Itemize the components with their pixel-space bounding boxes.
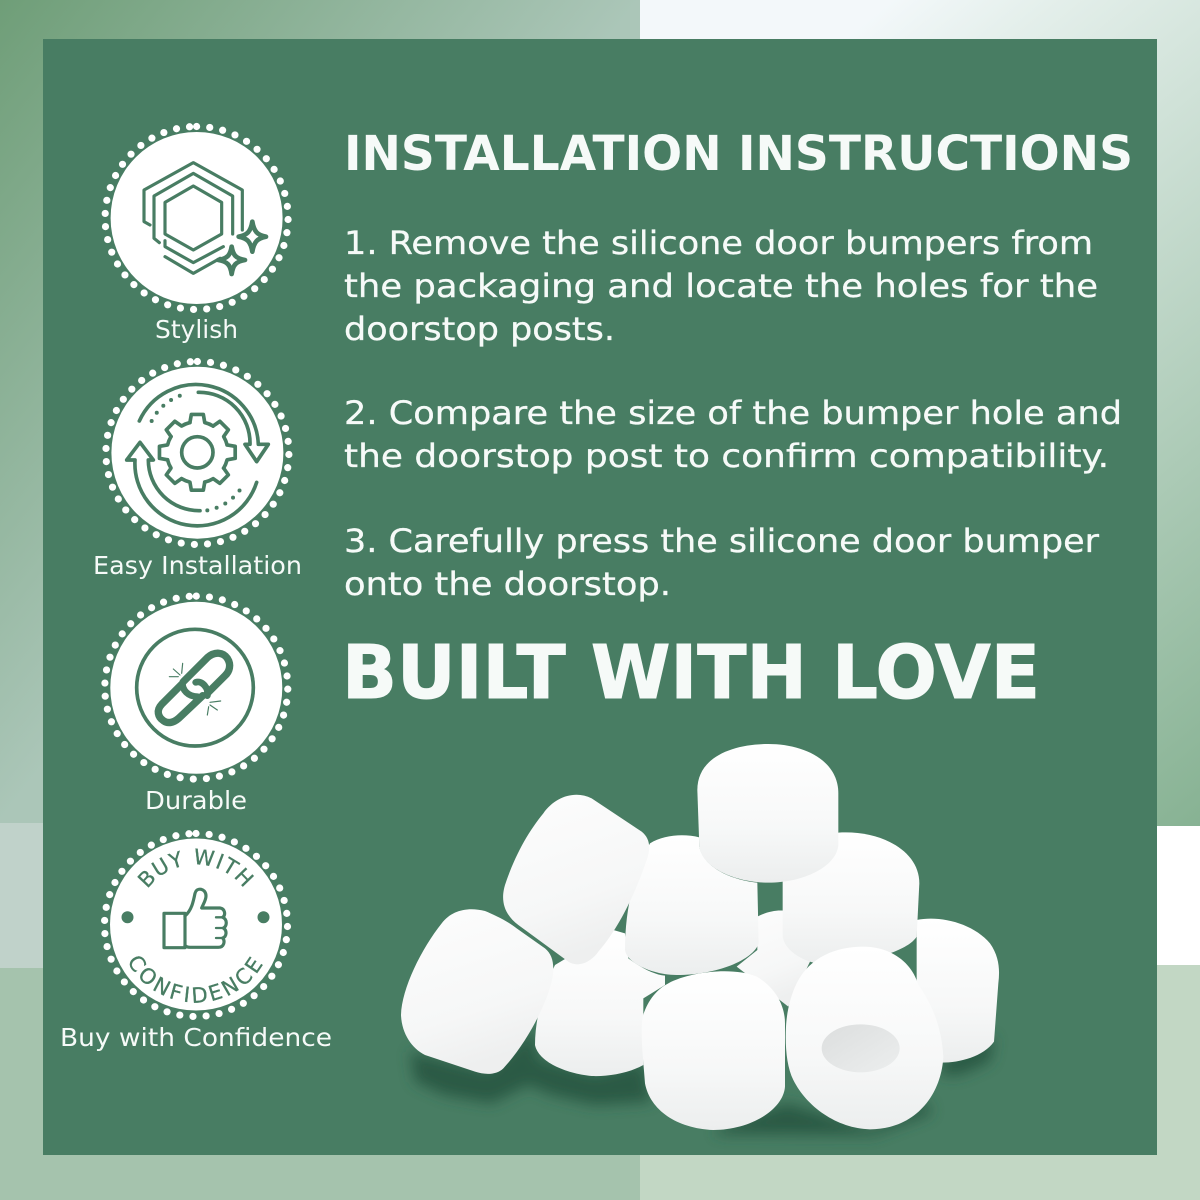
icon: layered hexagons with sparkles	[144, 163, 266, 274]
icon: gear with circular arrows	[127, 385, 268, 526]
bumpers, tilted left pair	[401, 795, 649, 1074]
heading: built with love: BUILT WITH LOVE	[342, 630, 1040, 716]
label: Buy with Confidence: Buy with Confidence	[60, 1023, 332, 1052]
step 2 text: 2. Compare the size of the bumper hole and	[344, 394, 1122, 432]
step 3 text: onto the doorstop.	[344, 565, 671, 603]
title: installation instructions: INSTALLATION INSTRUCTIONS	[344, 126, 1133, 182]
step 2 text	[344, 394, 1122, 475]
step 1 text	[344, 224, 1098, 348]
icon: side dots	[122, 911, 270, 923]
bumper: far left tilted	[401, 909, 553, 1074]
curved text: CONFIDENCE: CONFIDENCE	[130, 956, 263, 1003]
bumpers, front row	[642, 947, 943, 1130]
badge: Stylish	[105, 126, 288, 344]
shadows under pile	[410, 1028, 995, 1135]
step 1 text: the packaging and locate the holes for the	[344, 267, 1098, 305]
icon: thumbs up	[164, 889, 226, 948]
badge: Buy with Confidence	[60, 830, 332, 1052]
step 3 text: 3. Carefully press the silicone door bumper	[344, 522, 1100, 560]
label: Easy Installation: Easy Installation	[93, 551, 302, 580]
bumper: lower left	[535, 930, 665, 1076]
bumper: front middle	[642, 971, 785, 1130]
bumper: right middle	[783, 832, 919, 963]
label: Durable: Durable	[145, 786, 247, 815]
step 1 text: doorstop posts.	[344, 310, 615, 348]
bumper: top cap	[697, 744, 838, 883]
bumper: back middle	[737, 911, 810, 1007]
product photo: pile of white silicone bumpers	[401, 744, 999, 1135]
step 1 text: 1. Remove the silicone door bumpers from	[344, 224, 1093, 262]
bumpers, center stack	[625, 744, 838, 975]
bumper: far right	[917, 919, 999, 1063]
label: Stylish: Stylish	[155, 315, 238, 344]
bumper: tilted upper left	[503, 795, 649, 964]
badge: Easy Installation	[93, 362, 302, 580]
step 3 text	[344, 522, 1100, 603]
curved text: BUY WITH: BUY WITH	[137, 848, 254, 888]
bumpers, right part (back)	[737, 832, 999, 1063]
step 2 text: the doorstop post to confirm compatibility.	[344, 437, 1109, 475]
icon: chain link in ring	[137, 629, 253, 746]
badge: Durable	[105, 596, 288, 815]
bumper: center	[625, 835, 759, 975]
bumper: front right with hole	[786, 947, 943, 1129]
